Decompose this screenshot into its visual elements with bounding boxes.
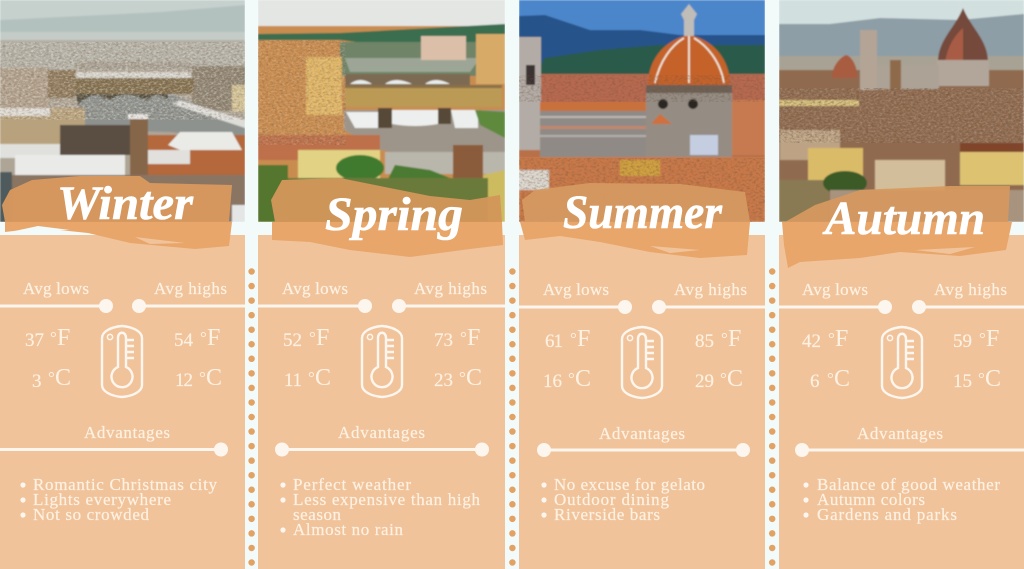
connector: advantages <box>0 442 228 456</box>
label: avg lows: Avg lows <box>23 279 89 298</box>
advantages list: Autumn colors <box>817 490 925 509</box>
advantages list: Gardens and parks <box>817 505 957 524</box>
temperatures: F <box>316 325 329 351</box>
temperatures: ° <box>979 329 986 348</box>
connector: lows <box>258 299 372 313</box>
title: Autumn: Autumn <box>822 192 985 245</box>
temperatures: C <box>315 365 331 391</box>
title: Spring: Spring <box>325 188 463 241</box>
temperatures: ° <box>50 328 57 347</box>
temperatures: ° <box>827 369 834 388</box>
connector: advantages <box>537 443 750 457</box>
spring content <box>258 279 505 539</box>
advantages list: Riverside bars <box>554 505 660 524</box>
brush stroke: spring <box>271 178 503 257</box>
connector: advantages <box>795 443 1024 457</box>
panel: autumn background <box>779 235 1024 569</box>
brush stroke: autumn <box>782 186 1012 268</box>
advantages list: Balance of good weather <box>817 475 1000 494</box>
title: Summer: Summer <box>563 186 723 239</box>
connector: lows <box>0 299 113 313</box>
advantages list <box>20 475 218 524</box>
temperatures: 54 <box>174 330 194 351</box>
temperatures: ° <box>720 369 727 388</box>
temperatures: F <box>728 326 741 352</box>
connector: advantages <box>275 442 489 456</box>
advantages list: No excuse for gelato <box>554 475 705 494</box>
panel: spring background <box>258 235 505 569</box>
temperatures: ° <box>459 368 466 387</box>
temperatures: 29 <box>695 371 714 392</box>
advantages list: Lights everywhere <box>33 490 171 509</box>
temperatures: ° <box>978 369 985 388</box>
temperatures <box>25 325 222 392</box>
temperatures: 11 <box>284 370 302 391</box>
temperatures: ° <box>200 328 207 347</box>
divider dots: column 1 <box>248 272 255 566</box>
temperatures <box>283 325 482 391</box>
advantages list: Romantic Christmas city <box>33 475 218 494</box>
temperatures: 15 <box>953 371 972 392</box>
advantages list <box>803 475 1000 524</box>
label: avg lows: Avg lows <box>282 279 348 298</box>
label: avg highs: Avg highs <box>934 280 1007 299</box>
temperatures: C <box>727 366 743 392</box>
advantages list: Almost no rain <box>293 520 404 539</box>
icon: thermometer <box>622 327 662 398</box>
temperatures: ° <box>199 368 206 387</box>
summer content <box>519 280 765 524</box>
connector: lows <box>519 300 632 314</box>
panel: winter background <box>0 235 245 569</box>
temperatures <box>802 326 1001 392</box>
temperatures: F <box>467 325 480 351</box>
temperatures: 85 <box>695 331 714 352</box>
temperatures: 37 <box>25 330 44 351</box>
temperatures: 59 <box>953 331 972 352</box>
advantages list <box>541 475 705 524</box>
photo: winter Ponte Vecchio in snow <box>0 0 245 222</box>
temperatures: C <box>834 366 850 392</box>
label: avg highs: Avg highs <box>674 280 747 299</box>
temperatures: ° <box>48 368 55 387</box>
panel: summer background <box>519 235 765 569</box>
temperatures <box>543 326 743 392</box>
heading: advantages: Advantages <box>84 423 170 442</box>
heading: advantages: Advantages <box>857 424 943 443</box>
connector: highs <box>132 299 245 313</box>
temperatures: 3 <box>32 371 42 392</box>
advantages list: Less expensive than high <box>293 490 480 509</box>
temperatures: C <box>55 365 71 391</box>
temperatures: ° <box>570 329 577 348</box>
advantages list: Not so crowded <box>33 505 150 524</box>
advantages list <box>280 475 480 539</box>
temperatures: 42 <box>802 331 821 352</box>
label: avg highs: Avg highs <box>414 279 487 298</box>
advantages list: Outdoor dining <box>554 490 670 509</box>
temperatures: F <box>577 326 590 352</box>
divider dots: column 3 <box>769 272 775 566</box>
photo: spring Ponte Vecchio and river <box>258 0 505 222</box>
connector: highs <box>912 300 1024 314</box>
icon: thermometer <box>102 326 142 397</box>
photo: autumn city skyline with Duomo <box>779 0 1024 222</box>
temperatures: 23 <box>434 370 453 391</box>
temperatures: C <box>206 365 222 391</box>
temperatures: F <box>57 325 70 351</box>
temperatures: F <box>835 326 848 352</box>
temperatures: 16 <box>543 371 562 392</box>
temperatures: ° <box>721 329 728 348</box>
label: avg lows: Avg lows <box>543 280 609 299</box>
temperatures: ° <box>460 328 467 347</box>
temperatures: ° <box>828 329 835 348</box>
temperatures: 6 <box>810 371 820 392</box>
temperatures: C <box>985 366 1001 392</box>
connector: highs <box>652 300 765 314</box>
brush stroke: winter <box>2 176 232 249</box>
icon: thermometer <box>882 327 922 398</box>
title: Winter: Winter <box>57 177 194 230</box>
temperatures: 61 <box>545 331 563 352</box>
temperatures: 73 <box>434 330 453 351</box>
temperatures: ° <box>309 328 316 347</box>
connector: lows <box>779 300 892 314</box>
label: avg highs: Avg highs <box>154 279 227 298</box>
temperatures: ° <box>308 368 315 387</box>
temperatures: C <box>466 365 482 391</box>
icon: thermometer <box>362 326 402 397</box>
winter content <box>0 279 245 524</box>
photo: summer Duomo with blue sky <box>519 0 765 222</box>
divider dots: column 2 <box>509 272 516 566</box>
advantages list: Perfect weather <box>293 475 411 494</box>
temperatures: C <box>575 366 591 392</box>
label: avg lows: Avg lows <box>802 280 868 299</box>
temperatures: ° <box>568 369 575 388</box>
temperatures: F <box>986 326 999 352</box>
brush stroke: summer <box>520 183 750 258</box>
heading: advantages: Advantages <box>338 423 425 442</box>
heading: advantages: Advantages <box>599 424 685 443</box>
autumn content <box>779 280 1024 524</box>
advantages list: season <box>293 505 342 524</box>
temperatures: 12 <box>175 370 193 391</box>
temperatures: 52 <box>283 330 302 351</box>
connector: highs <box>392 299 505 313</box>
temperatures: F <box>207 325 220 351</box>
